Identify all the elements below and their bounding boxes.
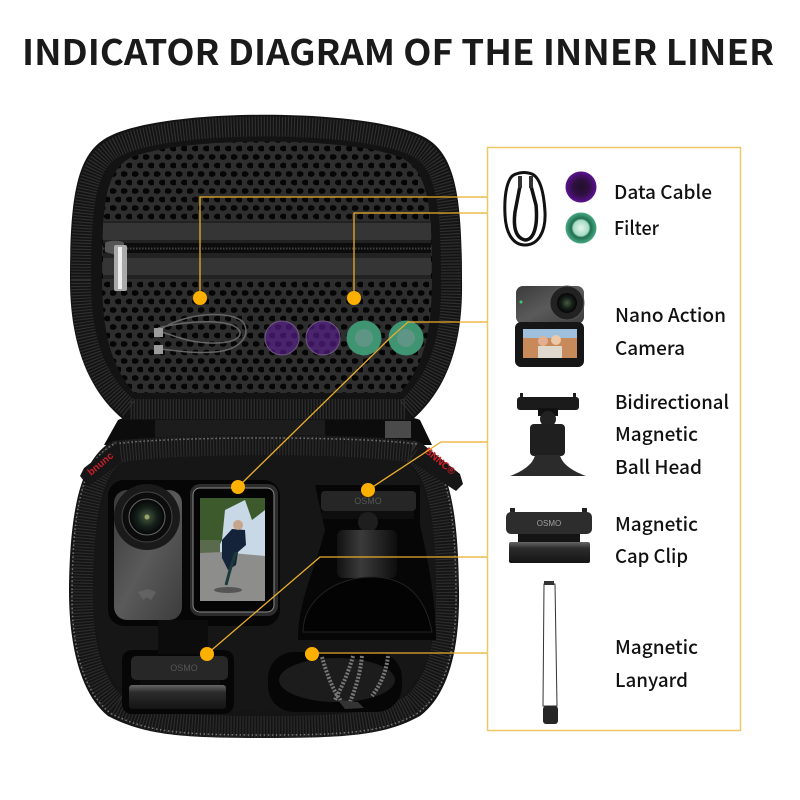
ball head in foam: [303, 491, 432, 632]
flip-screen in foam: [190, 484, 278, 616]
label: filter: Filter: [614, 214, 659, 241]
red brand tabs: BNNC®: [422, 446, 457, 478]
lanyard in foam: [279, 656, 395, 709]
icon: nano action camera: [515, 286, 584, 367]
leader: nano action camera: [231, 322, 487, 494]
leader lines and dots: [193, 197, 487, 661]
cap clip in foam: [129, 656, 228, 709]
leader: ball head: [361, 442, 487, 497]
hinge strap: [104, 418, 432, 445]
icon: magnetic cap clip: [506, 508, 592, 563]
icon: data cable: [505, 172, 545, 245]
label: magnetic: Magnetic: [615, 510, 698, 537]
stored filters: [265, 320, 424, 356]
red brand tabs: bnunc: [86, 450, 116, 478]
case lid: upper half: [70, 115, 462, 420]
carrying case: [69, 115, 463, 738]
icon: ball head: [510, 393, 586, 476]
zipper pull: [105, 241, 127, 291]
label: magnetic: Magnetic: [615, 420, 698, 447]
leader: data cable: [193, 197, 487, 305]
leader: cap clip: [200, 557, 487, 661]
icon: magnetic lanyard: [543, 581, 558, 724]
foam insert: [93, 455, 436, 712]
red brand tabs: [80, 442, 463, 491]
icon: green filter: [566, 212, 596, 244]
label: camera: Camera: [615, 334, 685, 361]
cyclist photo: [200, 498, 265, 601]
label: lanyard: Lanyard: [615, 666, 688, 693]
case base: lower half: [69, 435, 459, 738]
panel: accessories list: [488, 148, 740, 730]
zipper pocket: [103, 221, 431, 279]
icon: magnetic cap clip: OSMO: [537, 519, 561, 528]
label: ball head: Ball Head: [615, 453, 702, 480]
foam cavities: [108, 480, 436, 714]
leader: lanyard: [305, 647, 487, 661]
label: bidirectional: Bidirectional: [615, 388, 729, 415]
leader: filter: [347, 213, 487, 305]
cap clip in foam: OSMO: [170, 663, 198, 673]
label: data cable: Data Cable: [614, 178, 712, 205]
label: cap clip: Cap Clip: [615, 542, 688, 569]
label: nano action camera: Nano Action: [615, 301, 726, 328]
mesh lining: [102, 142, 432, 393]
title: INDICATOR DIAGRAM OF THE INNER LINER: [22, 25, 774, 76]
stored data cable: [154, 315, 246, 354]
ball head in foam: OSMO: [354, 496, 382, 506]
label: magnetic: Magnetic: [615, 633, 698, 660]
icon: purple filter: [566, 172, 596, 202]
action camera in foam: [114, 484, 182, 620]
